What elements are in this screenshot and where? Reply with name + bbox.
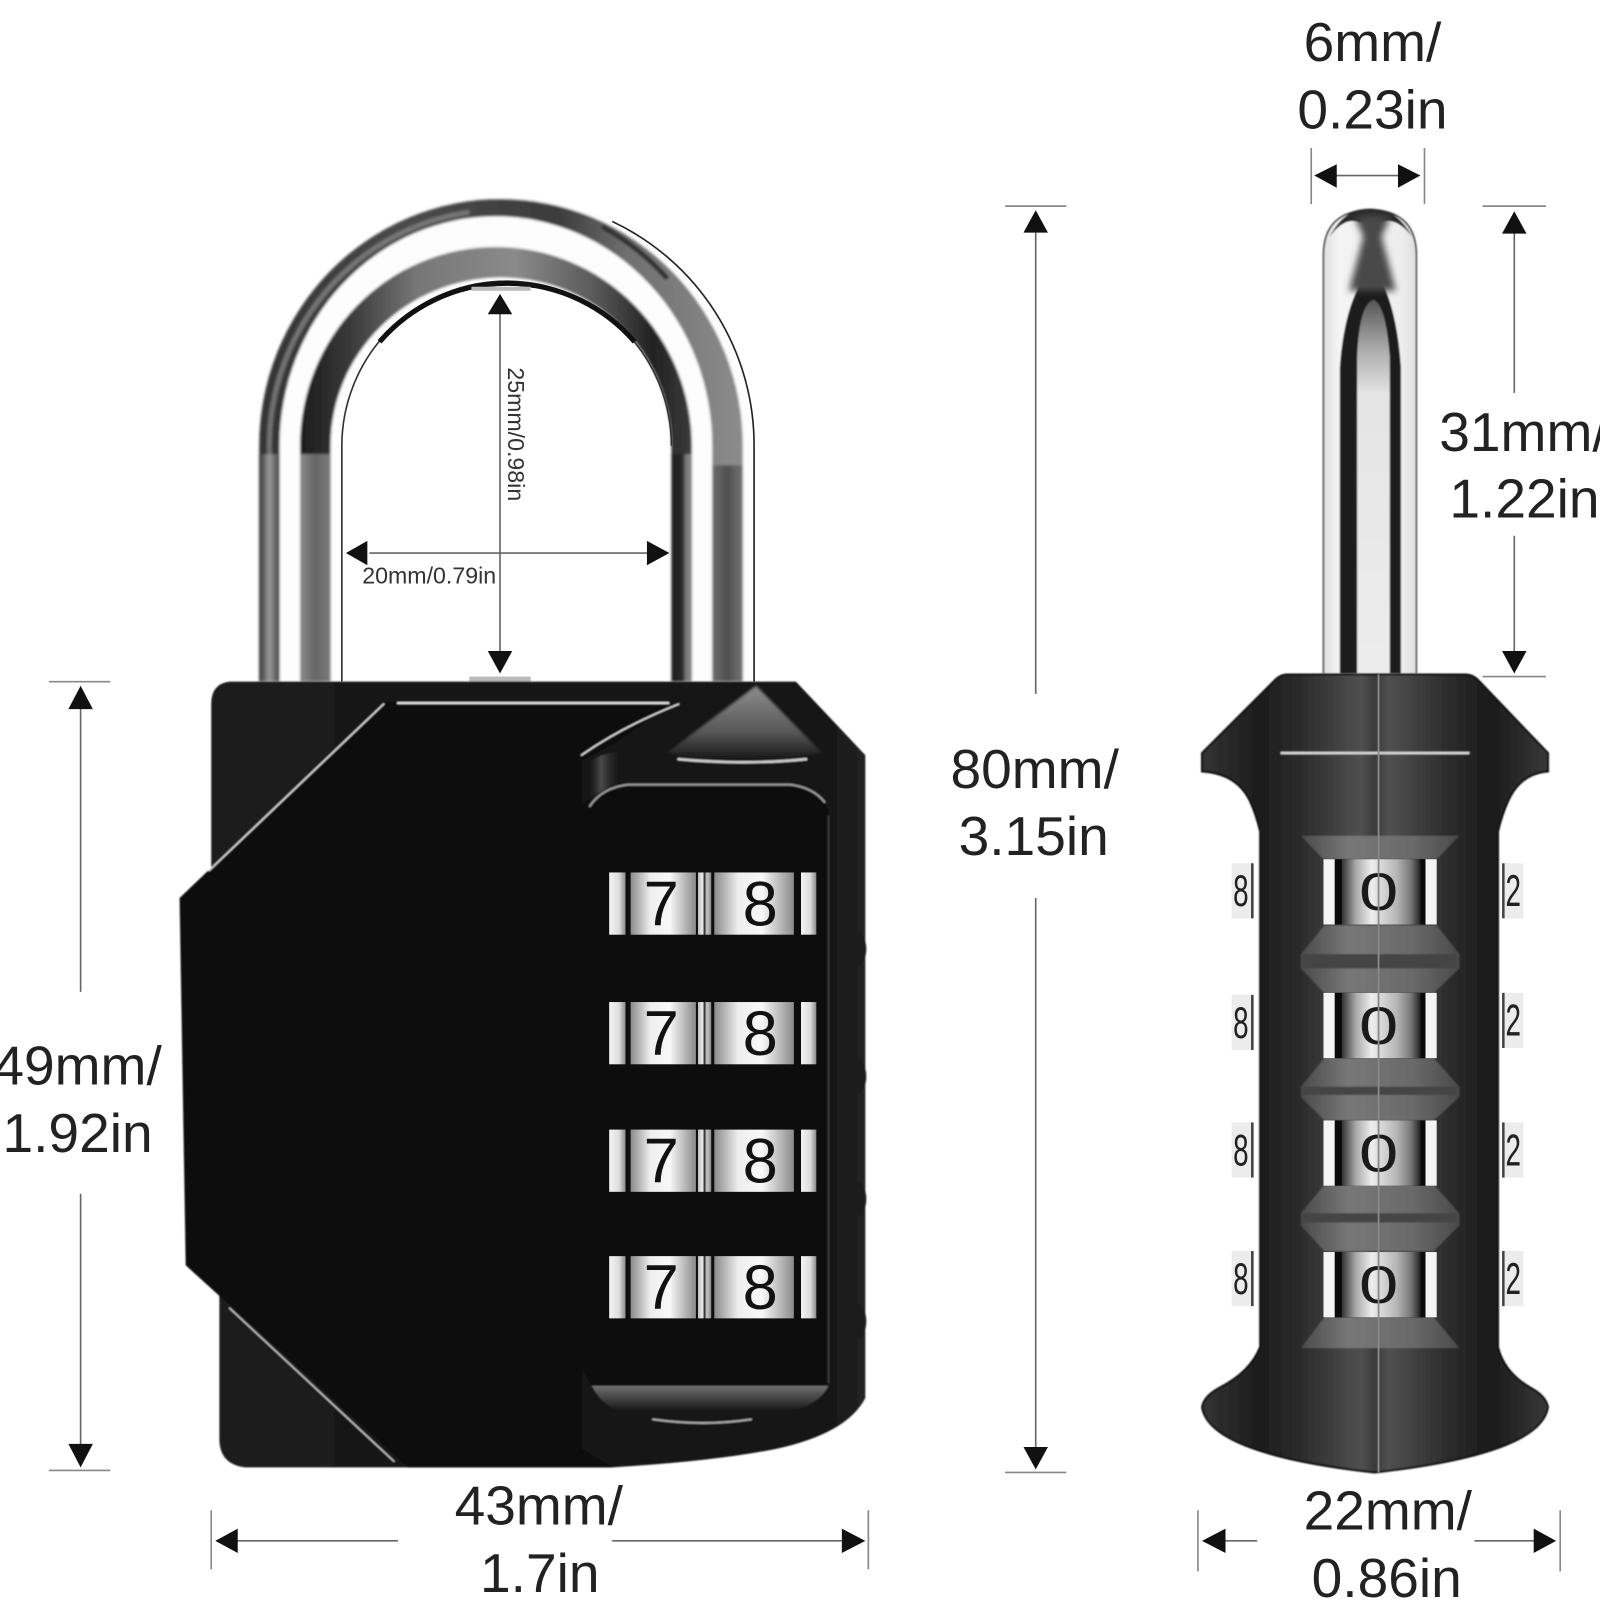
side dial row 1: [1323, 859, 1437, 924]
dimension: inner height 25mm: 25mm/0.98in: [503, 367, 529, 501]
side dial row 3: [1323, 1120, 1437, 1186]
right edge digits: [1502, 863, 1523, 1306]
dimension: inner height 25mm: [488, 294, 529, 673]
dimension: side width 22mm: 22mm/: [1304, 1480, 1473, 1542]
dial row 2: 7: [644, 999, 679, 1069]
left edge digits: 8: [1233, 865, 1249, 916]
right edge digits: 2: [1506, 995, 1521, 1045]
dimension: shackle diameter 6mm: [1297, 11, 1448, 204]
side dial row 3: 0: [1359, 1124, 1398, 1183]
side highlight line: [1281, 752, 1469, 754]
dimension: side width 22mm: [1198, 1480, 1560, 1600]
side view padlock: [1202, 208, 1548, 1472]
lock body: [180, 682, 866, 1467]
dimension: body height 49mm: 1.92in: [2, 1102, 153, 1164]
side dial row 2: 0: [1359, 996, 1398, 1056]
dimension: shackle diameter 6mm: 6mm/: [1304, 11, 1442, 73]
dial row 2: 8: [743, 999, 778, 1069]
side bumps: [844, 931, 866, 1340]
dial row 4: 8: [743, 1253, 778, 1323]
combination dials: [609, 870, 816, 1323]
right edge digits: 2: [1506, 1124, 1521, 1175]
dimension: body width 43mm: 43mm/: [455, 1474, 624, 1536]
dimension: total height 80mm: 80mm/: [951, 738, 1120, 800]
dimension: shackle height 31mm: 1.22in: [1449, 467, 1600, 529]
shackle stop pads: [469, 287, 531, 682]
dial row 3: [609, 1127, 816, 1197]
dial row 1: 7: [644, 870, 679, 940]
side dial row 2: [1323, 993, 1437, 1058]
dial row 1: 8: [743, 870, 778, 940]
dial row 4: 7: [644, 1253, 679, 1323]
side dials: [1323, 859, 1437, 1317]
side shackle: [1323, 208, 1416, 673]
side body: [1202, 674, 1548, 1472]
side center seam: [1378, 674, 1380, 1472]
dimension: total height 80mm: 3.15in: [959, 805, 1109, 867]
dimension: body height 49mm: [0, 682, 162, 1470]
shackle: [259, 198, 754, 682]
dimension: shackle height 31mm: [1439, 206, 1600, 677]
dial row 2: [609, 999, 816, 1069]
dial row 3: 8: [743, 1127, 778, 1197]
raised dial panel: [582, 784, 829, 1386]
dimension: total height 80mm: [951, 206, 1120, 1472]
gloss left corner: [584, 751, 628, 806]
left edge digits: [1232, 863, 1254, 1306]
dimension: inner width 20mm: 20mm/0.79in: [362, 563, 496, 589]
dial row 4: [609, 1253, 816, 1323]
right edge digits: 2: [1506, 1253, 1521, 1303]
left edge digits: 8: [1233, 1253, 1249, 1303]
ridges between dials: [1301, 836, 1459, 1348]
side dial row 4: 0: [1359, 1255, 1398, 1315]
front plate: [180, 702, 673, 1467]
dial row 3: 7: [644, 1127, 679, 1197]
front view padlock: [180, 198, 866, 1467]
bottom gloss: [592, 1386, 829, 1412]
dimension: body width 43mm: [211, 1474, 868, 1600]
side dial row 1: 0: [1359, 863, 1398, 922]
dial row 1: [609, 870, 816, 940]
top right gloss triangle: [666, 686, 822, 760]
highlights: [209, 703, 829, 1461]
left edge digits: 8: [1233, 1124, 1249, 1175]
dimension: shackle diameter 6mm: 0.23in: [1297, 79, 1448, 141]
left edge digits: 8: [1233, 997, 1249, 1047]
dimension: inner width 20mm: [346, 541, 669, 589]
right edge digits: 2: [1506, 865, 1521, 916]
side dial row 4: [1323, 1252, 1437, 1317]
